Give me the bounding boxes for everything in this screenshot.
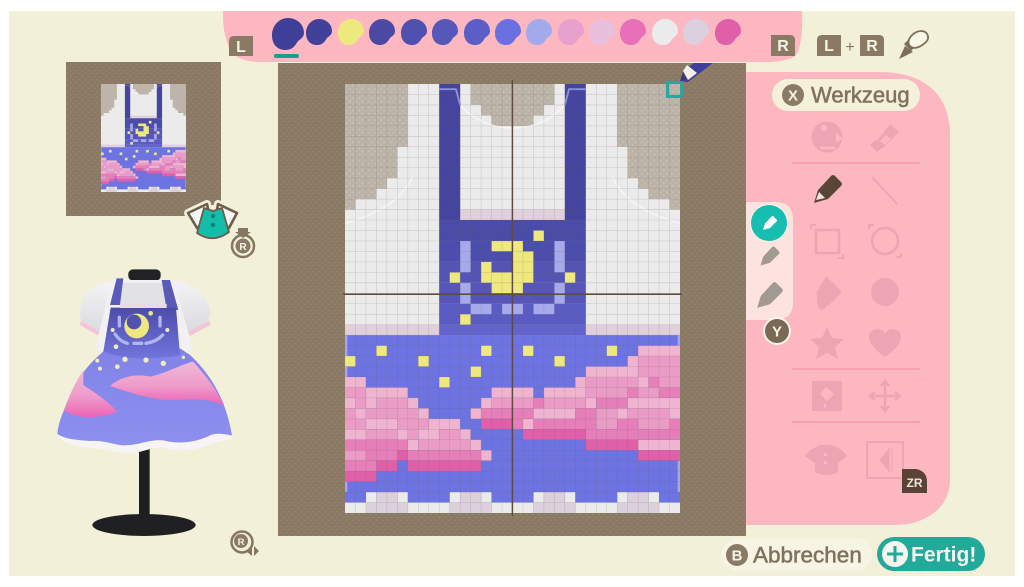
- icon: right stick press: R: [239, 242, 247, 253]
- icon: line tool: [872, 177, 897, 204]
- medium pen: [760, 246, 780, 266]
- button: Fertig: [877, 537, 985, 571]
- icon: heart: [869, 329, 901, 357]
- palette swatch: indigo 2: [401, 19, 427, 45]
- palette swatch: indigo 3: [432, 19, 458, 45]
- label: Werkzeug: X: [788, 88, 798, 104]
- moon: [124, 311, 153, 338]
- icon: rotate mannequin: R: [238, 537, 245, 548]
- icon: pencil tool: [814, 175, 842, 203]
- button combo: L + R: L: [824, 38, 834, 55]
- panel: pen size selector: [746, 202, 793, 320]
- tool divider 1: [792, 162, 920, 164]
- icon: rectangle tool: [811, 225, 843, 258]
- tool divider 2: [792, 368, 920, 370]
- palette swatch: selected navy: [272, 18, 304, 50]
- cursor square: [668, 82, 682, 96]
- button: Abbrechen: Abbrechen: [753, 542, 862, 568]
- icon: right stick press: [232, 228, 254, 257]
- panel: top palette bar: [223, 11, 802, 62]
- panel: thumbnail preview: [66, 62, 221, 216]
- button combo: L + R: R: [866, 38, 878, 55]
- palette swatch: indigo 1: [369, 19, 395, 45]
- torso: [95, 280, 193, 350]
- skirt clouds: [64, 362, 224, 417]
- icon: stamp: [812, 381, 842, 411]
- icon: rotate mannequin: [232, 532, 259, 556]
- icon: palette: [812, 122, 843, 152]
- button: R: [771, 35, 795, 56]
- icon: paint tube: [870, 124, 899, 152]
- button: ZR: ZR: [906, 476, 923, 490]
- button: ZR: [902, 469, 927, 493]
- palette swatch: indigo 4: [464, 19, 490, 45]
- panel: tool panel: [746, 72, 950, 525]
- icon: circle tool: [869, 225, 901, 257]
- button: R: R: [777, 38, 789, 55]
- dress stars: [95, 328, 185, 371]
- selected colour underline: [274, 54, 299, 58]
- palette swatch: periwinkle: [495, 19, 521, 45]
- icon: fill bucket: [816, 276, 842, 310]
- button: L: L: [236, 39, 246, 56]
- palette swatch: pale pink: [589, 19, 615, 45]
- button: Y: [763, 317, 791, 345]
- icon: filled circle: [871, 278, 899, 306]
- bib and straps: [103, 278, 180, 358]
- mannequin with dress: [56, 269, 232, 536]
- icon: move arrows: [870, 381, 900, 411]
- palette swatch: magenta: [715, 19, 741, 45]
- palette swatch: navy: [306, 19, 332, 45]
- button combo: L + R: +: [845, 39, 855, 56]
- label: Werkzeug: Werkzeug: [811, 82, 910, 108]
- canvas crosshair: [343, 80, 682, 516]
- palette swatch: yellow: [338, 19, 364, 45]
- thumbnail pattern: [101, 84, 186, 192]
- palette swatch: pale lavender: [683, 19, 709, 45]
- pixel canvas: [345, 84, 680, 513]
- icon: shirt tool: [805, 445, 847, 475]
- sleeves: [80, 280, 211, 336]
- button: L: [229, 36, 253, 56]
- icon: shirt mode: [188, 204, 237, 239]
- button: Abbrechen: [722, 538, 872, 571]
- tool divider 3: [792, 421, 920, 423]
- icon: split view: [867, 442, 903, 478]
- tool icons: [792, 122, 927, 493]
- bib dashes: [115, 317, 163, 343]
- button: Fertig: Fertig!: [911, 544, 976, 566]
- button: Y: Y: [772, 324, 782, 340]
- panel: editing canvas frame: [278, 63, 746, 536]
- icon: cursor pen: [680, 63, 713, 82]
- skirt: [57, 348, 232, 445]
- label: Werkzeug: [772, 79, 920, 111]
- selected small pen: [750, 204, 788, 242]
- collar shade: [120, 283, 166, 305]
- icon: eyedropper: [899, 31, 928, 59]
- button combo: L + R: [817, 35, 884, 56]
- large pen: [757, 282, 783, 308]
- stand: [92, 269, 196, 536]
- palette swatch: hot pink: [620, 19, 646, 45]
- skirt hem: [57, 420, 233, 453]
- palette swatch: pink: [558, 19, 584, 45]
- palette swatch: white: [652, 19, 678, 45]
- button: Abbrechen: B: [732, 548, 743, 564]
- icon: star: [810, 327, 844, 359]
- palette swatch: lilac: [526, 19, 552, 45]
